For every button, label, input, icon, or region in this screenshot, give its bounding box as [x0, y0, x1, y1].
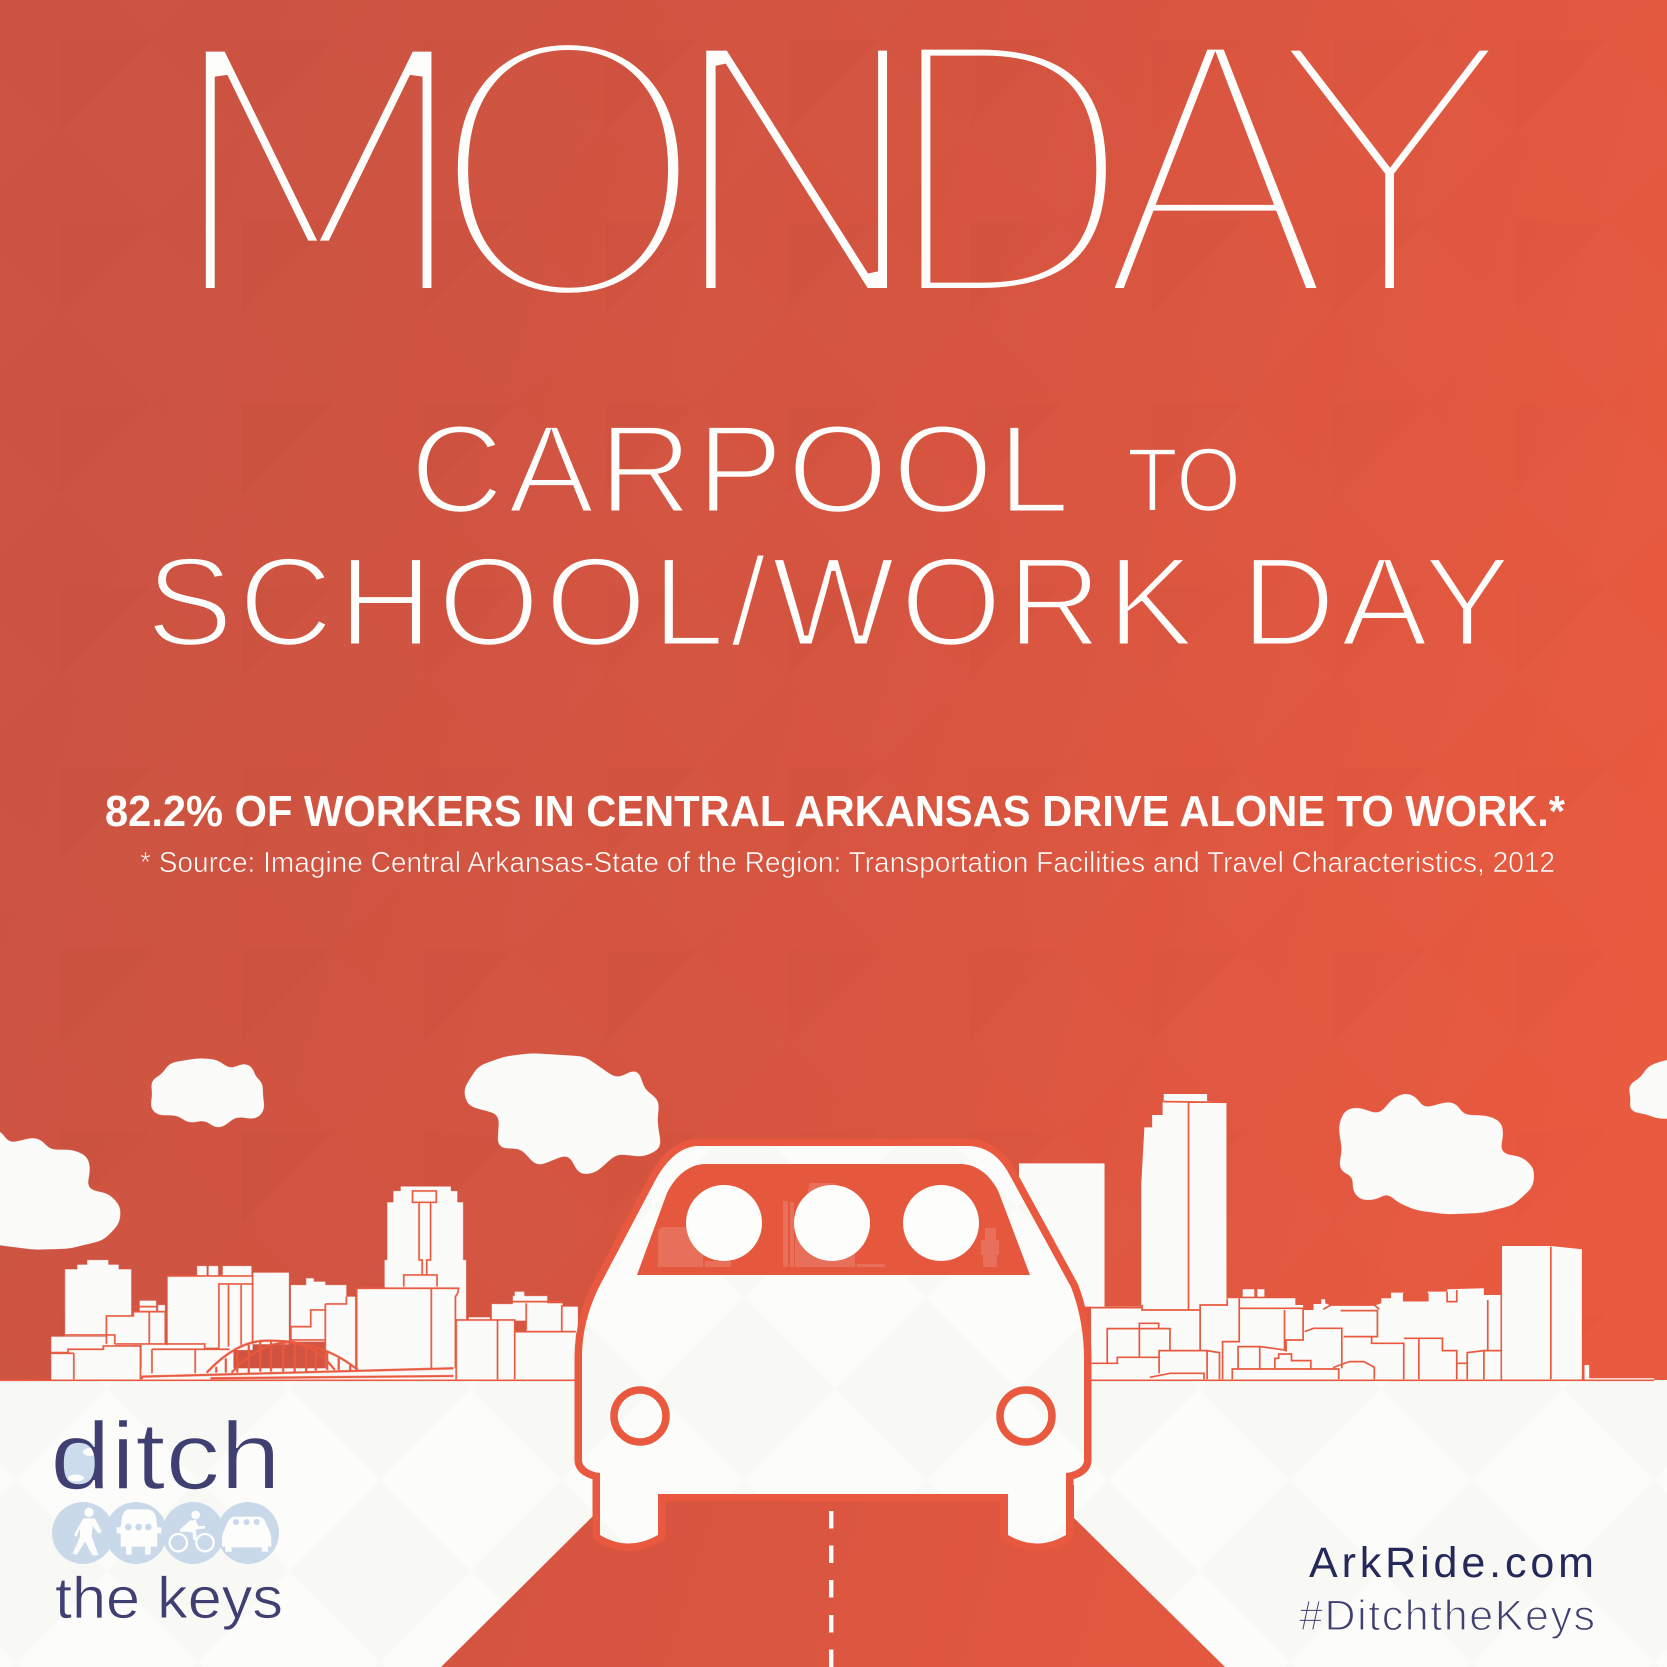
ground	[0, 1380, 1667, 1667]
statistic text: 82.2% OF WORKERS IN CENTRAL ARKANSAS DRIVE ALONE TO WORK.*	[105, 787, 1566, 836]
logo words: the keys: the keys	[55, 1566, 283, 1631]
logo word: ditch: ditch	[50, 1403, 281, 1510]
car body	[582, 1146, 1084, 1544]
icon: car	[582, 1146, 1084, 1544]
source footnote: * Source: Imagine Central Arkansas-State of the Region: Transportation Facilities and Travel Characteristics, 2012	[140, 847, 1555, 879]
headlights	[614, 1390, 1052, 1442]
road centre dashes	[829, 1511, 833, 1667]
title: MONDAY	[206, 45, 1488, 293]
skyline: left	[51, 1187, 578, 1380]
mode icons: walker, bus, bike, car	[73, 1508, 271, 1556]
passengers	[686, 1185, 979, 1261]
heading: carpool to school/work day: SCHOOL/WORK DAY	[146, 530, 1516, 672]
clouds	[0, 1054, 1667, 1249]
bridge	[142, 1341, 453, 1379]
skyline: right	[1019, 1094, 1654, 1380]
faint skyline in windshield	[658, 1183, 999, 1267]
logo bowl of d	[56, 1439, 102, 1485]
windshield	[637, 1164, 1030, 1275]
website: ArkRide.com	[1309, 1539, 1594, 1587]
hashtag: #DitchtheKeys	[1299, 1592, 1595, 1640]
heading: carpool to school/work day: TO	[1127, 430, 1241, 531]
heading: carpool to school/work day: CARPOOL	[410, 398, 1074, 540]
mode circles	[52, 1502, 279, 1564]
road	[441, 1485, 1225, 1667]
heading: carpool to school/work day	[154, 426, 1504, 645]
logo: ditch the keys	[50, 1403, 283, 1631]
